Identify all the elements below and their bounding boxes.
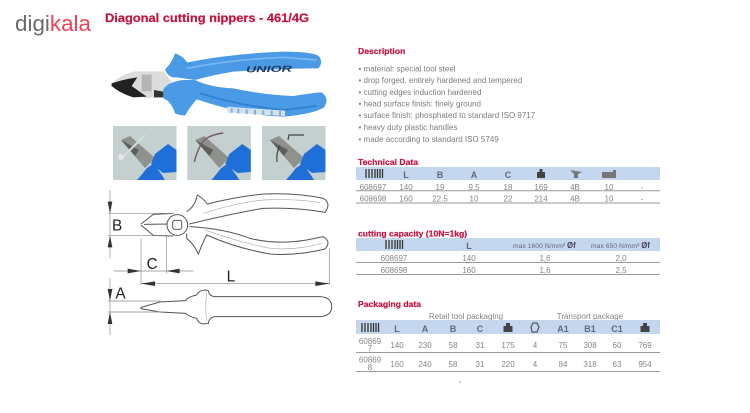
lower handle bbox=[163, 80, 327, 117]
icon: weight bbox=[504, 323, 512, 332]
technical drawing with dimensions bbox=[108, 190, 332, 335]
dimension B bbox=[108, 190, 174, 258]
photo: blue-handled pliers bbox=[111, 52, 327, 117]
table rows: 2,5 bbox=[615, 266, 627, 275]
table header: C bbox=[505, 170, 512, 180]
table rows: 230 bbox=[418, 341, 432, 350]
table header: A bbox=[422, 324, 429, 334]
table rows: 608698 bbox=[381, 266, 408, 275]
table header: L bbox=[466, 241, 472, 251]
section: technical data bbox=[356, 157, 660, 204]
bullet list: • made according to standard ISO 5749 bbox=[358, 135, 499, 144]
table header: B bbox=[450, 324, 457, 334]
section: packaging data bbox=[356, 299, 660, 372]
table rows: 10 bbox=[470, 194, 479, 204]
thumbnail: cutting wire bbox=[187, 126, 251, 180]
plier head bbox=[111, 71, 172, 98]
table rows bbox=[356, 337, 660, 372]
bullet list: • material: special tool steel bbox=[358, 64, 456, 74]
table rows: 214 bbox=[534, 194, 548, 204]
table rows: 769 bbox=[638, 341, 652, 350]
table rows: 31 bbox=[476, 341, 485, 350]
dimension A bbox=[108, 278, 161, 335]
table rows: 175 bbox=[501, 341, 515, 350]
table rows: 4B bbox=[570, 194, 580, 204]
heading: technical data: Technical Data bbox=[358, 157, 418, 167]
dimension L bbox=[141, 248, 329, 286]
table header bbox=[466, 241, 650, 251]
table rows: 4 bbox=[533, 341, 538, 350]
table rows: 140 bbox=[399, 183, 413, 192]
table rows: 58 bbox=[449, 341, 458, 350]
bullet list: • cutting edges induction hardened bbox=[358, 88, 481, 97]
table rows: 169 bbox=[534, 183, 548, 192]
table rows: 160 bbox=[399, 194, 413, 204]
bullet list bbox=[358, 64, 536, 144]
drawing: top view outline bbox=[141, 194, 328, 254]
table rows: 2,0 bbox=[615, 254, 627, 263]
table rows: 58 bbox=[449, 360, 458, 369]
table rows: 75 bbox=[559, 341, 568, 350]
table rows: 8 bbox=[368, 363, 373, 372]
table rows: 140 bbox=[462, 254, 476, 263]
group labels: Retail tool packaging bbox=[429, 312, 503, 321]
table rows: 63 bbox=[613, 360, 622, 369]
table rows: 22 bbox=[504, 194, 513, 204]
heading: packaging data: Packaging data bbox=[358, 299, 421, 309]
table rows: 60869 bbox=[359, 337, 382, 346]
table rows: 10 bbox=[605, 194, 614, 204]
dimension B: B bbox=[112, 217, 122, 234]
title: Diagonal cutting nippers - 461/4G bbox=[105, 11, 309, 25]
dimension A: A bbox=[115, 285, 126, 302]
dimension C: C bbox=[147, 256, 158, 273]
table rows: 954 bbox=[638, 360, 652, 369]
brand mark: UNIOR bbox=[246, 64, 293, 74]
table header: max 650 N/mm² Øf bbox=[591, 241, 650, 250]
table rows: 7 bbox=[368, 344, 373, 353]
table rows: 18 bbox=[504, 183, 513, 192]
table rows: 608697 bbox=[381, 254, 408, 263]
table header bbox=[394, 324, 623, 334]
table rows: 60869 bbox=[359, 356, 382, 364]
icon: barcode bbox=[366, 169, 382, 178]
group labels bbox=[429, 312, 624, 321]
table rows bbox=[356, 254, 660, 275]
bullet list: • surface finish: phosphated to standard ISO 9717 bbox=[358, 111, 536, 120]
heading: cutting capacity: cutting capacity (10N=1kg) bbox=[358, 228, 467, 238]
table rows: 160 bbox=[462, 266, 476, 275]
table rows: 4 bbox=[533, 360, 538, 369]
table rows: 220 bbox=[501, 360, 515, 369]
table rows: 9.5 bbox=[468, 183, 480, 192]
table rows: 240 bbox=[418, 360, 432, 369]
table header: max 1600 N/mm² Øf bbox=[513, 241, 576, 250]
bullet list: • head surface finish: finely ground bbox=[358, 100, 481, 108]
drawing: side view outline bbox=[141, 290, 332, 324]
table rows: 10 bbox=[605, 183, 614, 192]
icon: weight bbox=[640, 323, 650, 332]
section: description bbox=[358, 46, 536, 144]
table rows: - bbox=[641, 183, 644, 192]
icon: barcode bbox=[362, 323, 378, 332]
thumbnail: cutting bent wire bbox=[262, 126, 326, 180]
table rows: 1,6 bbox=[539, 266, 551, 275]
icon: weight bbox=[537, 169, 545, 178]
table rows: 160 bbox=[390, 360, 404, 369]
table rows: 22.5 bbox=[432, 194, 448, 204]
table rows: - bbox=[641, 194, 644, 204]
dimension L: L bbox=[227, 269, 236, 286]
table rows: 19 bbox=[436, 183, 445, 192]
table rows: 608697 bbox=[360, 183, 387, 192]
icon: rivet bbox=[602, 170, 616, 178]
table rows: 31 bbox=[476, 360, 485, 369]
section: cutting capacity bbox=[356, 228, 660, 275]
table header: C1 bbox=[611, 324, 623, 334]
group labels: Transport package bbox=[557, 312, 624, 321]
table header: L bbox=[403, 170, 409, 180]
table rows: 4B bbox=[570, 183, 580, 192]
table rows bbox=[356, 183, 660, 204]
table rows: 60 bbox=[613, 341, 622, 350]
table rows: 608698 bbox=[360, 194, 387, 204]
icon: hand bbox=[531, 323, 539, 332]
table header: L bbox=[394, 324, 400, 334]
table rows: 1,6 bbox=[539, 254, 551, 263]
heading: description: Description bbox=[358, 46, 405, 56]
thumbnail: cutting nail bbox=[113, 126, 176, 180]
table header bbox=[403, 170, 512, 180]
barcode label bbox=[227, 107, 285, 116]
dimension C bbox=[114, 235, 193, 285]
table header: A1 bbox=[557, 324, 569, 334]
logo: digikala: digikala bbox=[15, 11, 91, 36]
table header: B bbox=[437, 170, 444, 180]
photo: three cutting thumbnails bbox=[113, 126, 326, 180]
table header: C bbox=[477, 324, 484, 334]
icon: barcode bbox=[386, 240, 402, 249]
table rows: 318 bbox=[583, 360, 597, 369]
table rows: 140 bbox=[390, 341, 404, 350]
table header: A bbox=[471, 170, 478, 180]
icon: head bbox=[570, 170, 582, 178]
upper handle bbox=[165, 52, 321, 80]
table rows: 84 bbox=[559, 360, 568, 369]
table header: B1 bbox=[584, 324, 596, 334]
bullet list: • heavy duty plastic handles bbox=[358, 123, 457, 132]
table rows: 308 bbox=[583, 341, 597, 350]
bullet list: • drop forged, entirely hardened and tempered bbox=[358, 76, 522, 85]
